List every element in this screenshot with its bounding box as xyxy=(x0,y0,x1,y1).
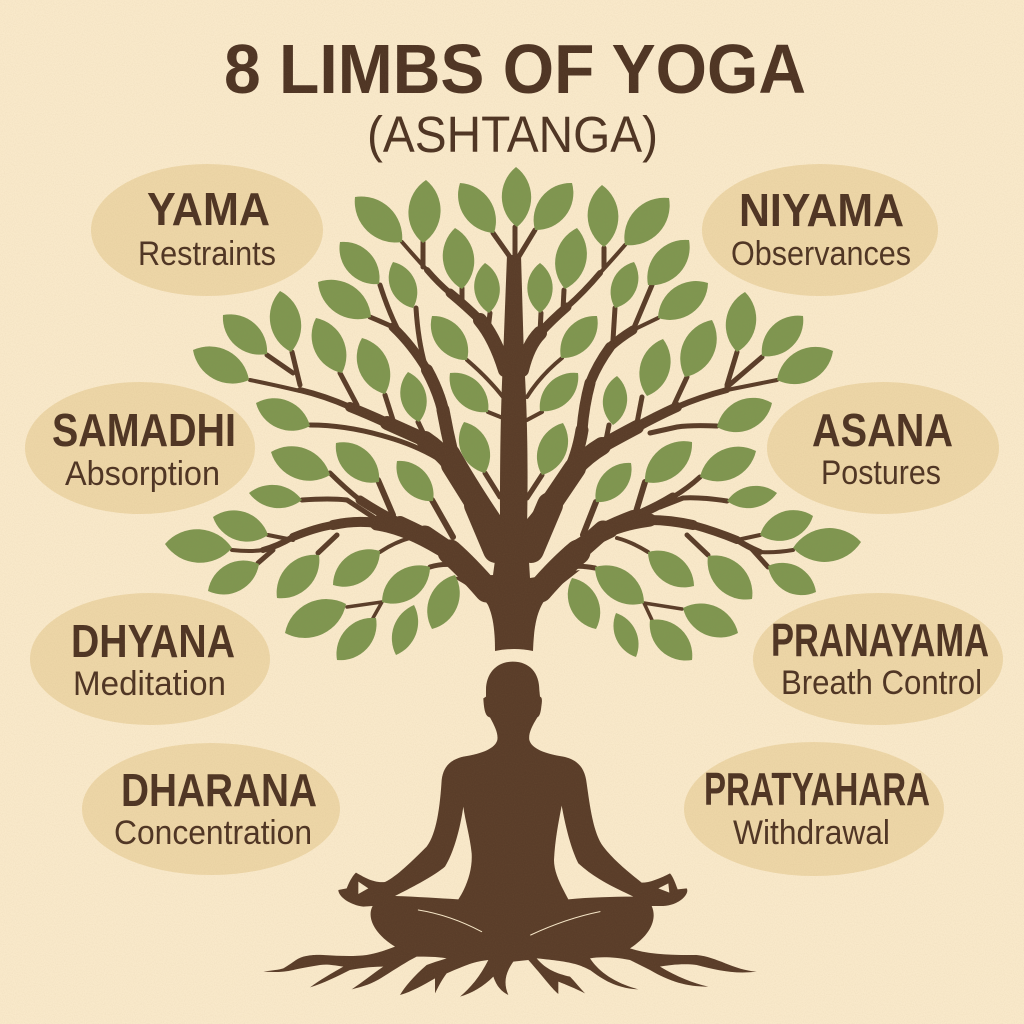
limb: Yama: YAMA xyxy=(147,183,270,235)
limb: Dharana: Concentration xyxy=(114,814,312,852)
meditating figure with roots xyxy=(263,662,757,997)
limb: Pratyahara: PRATYAHARA xyxy=(704,763,930,815)
subtitle: (ASHTANGA) xyxy=(367,106,658,163)
limb: Niyama: NIYAMA xyxy=(739,184,904,236)
limb: Samadhi: SAMADHI xyxy=(52,404,236,456)
limb: Samadhi: Absorption xyxy=(65,455,220,493)
limb: Dhyana: DHYANA xyxy=(71,615,235,667)
limb: Asana: ASANA xyxy=(812,404,953,456)
limb: Asana xyxy=(767,382,999,514)
limb: Dharana xyxy=(82,743,340,875)
limb: Asana: Postures xyxy=(821,454,941,492)
tree trunk and branches xyxy=(232,227,793,651)
limb: Niyama xyxy=(702,164,938,296)
limb: Dhyana xyxy=(30,593,270,725)
limb: Pratyahara xyxy=(684,742,944,876)
limb: Samadhi xyxy=(25,382,255,514)
limb: Pratyahara: Withdrawal xyxy=(733,814,890,852)
limb: Yama: Restraints xyxy=(138,235,276,273)
limb: Pranayama xyxy=(753,593,1003,725)
limb: Yama xyxy=(91,164,323,296)
limb: Dharana: DHARANA xyxy=(121,764,317,816)
title: 8 LIMBS OF YOGA xyxy=(224,30,806,108)
limb: Niyama: Observances xyxy=(731,235,911,273)
tree leaves xyxy=(165,167,861,661)
limb: Pranayama: Breath Control xyxy=(781,664,982,702)
limb: Dhyana: Meditation xyxy=(73,665,226,703)
